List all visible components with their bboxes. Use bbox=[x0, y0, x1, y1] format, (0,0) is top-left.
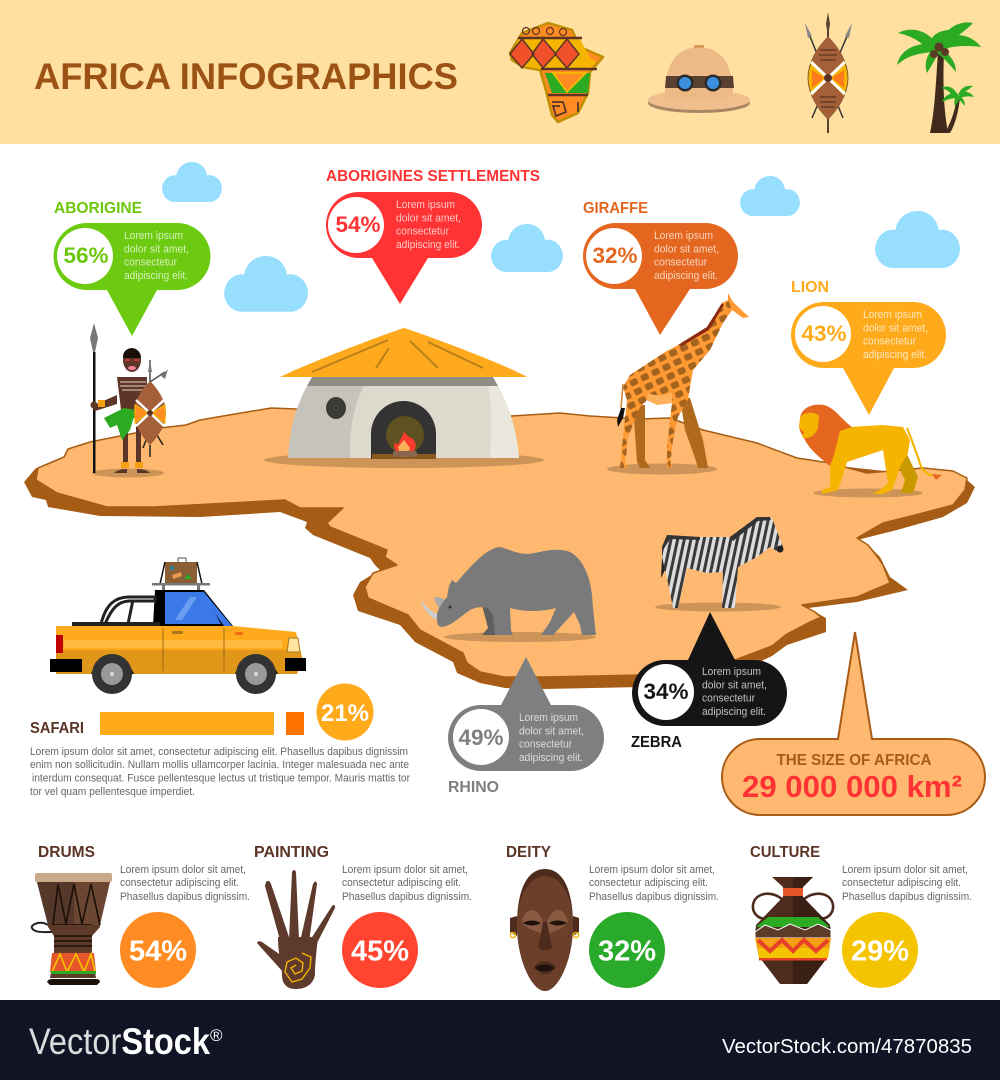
heading: ZEBRA bbox=[631, 734, 682, 751]
balloon text: consectetur bbox=[654, 256, 707, 268]
balloon text: Lorem ipsum bbox=[702, 666, 761, 678]
balloon text: consectetur bbox=[396, 226, 449, 238]
illustration: aborigine warrior bbox=[90, 323, 168, 478]
description: consectetur adipiscing elit. bbox=[120, 877, 239, 889]
cloud bbox=[162, 162, 222, 202]
panel: giraffe callout bbox=[583, 200, 738, 335]
description bbox=[342, 864, 472, 903]
balloon text: dolor sit amet, bbox=[863, 322, 928, 334]
description: enim non sollicitudin. Nullam mollis ullamcorper lacinia. Integer malesuada nec ante bbox=[30, 759, 409, 771]
white circle with percentage: 43% bbox=[801, 321, 847, 346]
description bbox=[589, 864, 719, 903]
illustration: rhino bbox=[421, 547, 596, 642]
white circle with percentage: 32% bbox=[592, 243, 638, 268]
balloon text: consectetur bbox=[519, 738, 572, 750]
balloon bbox=[448, 657, 604, 771]
balloon text bbox=[519, 712, 584, 764]
balloon bbox=[583, 223, 738, 335]
balloon text: consectetur bbox=[702, 692, 755, 704]
balloon text: Lorem ipsum bbox=[654, 230, 713, 242]
percentage circle: 29% bbox=[851, 936, 909, 968]
panel: safari bbox=[30, 684, 410, 798]
balloon bbox=[54, 223, 210, 336]
description: Phasellus dapibus dignissim. bbox=[120, 891, 250, 903]
balloon text bbox=[702, 666, 767, 718]
pointer balloon bbox=[722, 632, 985, 815]
illustration: giraffe bbox=[607, 293, 749, 474]
percentage circle bbox=[589, 912, 665, 988]
balloon bbox=[326, 192, 482, 304]
balloon text bbox=[654, 230, 719, 282]
description: Lorem ipsum dolor sit amet, bbox=[589, 864, 715, 876]
description: consectetur adipiscing elit. bbox=[842, 877, 961, 889]
balloon text: Lorem ipsum bbox=[519, 712, 578, 724]
balloon text: adipiscing elit. bbox=[519, 752, 583, 764]
balloon text bbox=[124, 230, 189, 282]
balloon text: dolor sit amet, bbox=[654, 244, 719, 256]
panel: zebra callout bbox=[631, 612, 787, 751]
header band bbox=[0, 0, 1000, 144]
balloon text: Lorem ipsum bbox=[863, 309, 922, 321]
progress bar bbox=[100, 712, 304, 735]
balloon text: dolor sit amet, bbox=[396, 212, 461, 224]
white circle with percentage bbox=[57, 228, 113, 284]
icon: pith helmet bbox=[648, 45, 750, 113]
description: interdum consequat. Fusce pellentesque lectus ut tristique tempor. Mauris mattis tor bbox=[32, 772, 410, 784]
description bbox=[120, 864, 250, 903]
heading: CULTURE bbox=[750, 844, 820, 861]
percentage circle bbox=[316, 684, 374, 740]
registered mark: ® bbox=[210, 1026, 223, 1045]
panel: settlements callout bbox=[326, 168, 540, 304]
description: Phasellus dapibus dignissim. bbox=[342, 891, 472, 903]
cloud bbox=[491, 224, 563, 272]
balloon text: adipiscing elit. bbox=[654, 270, 718, 282]
white circle with percentage bbox=[586, 228, 642, 284]
percentage circle: 45% bbox=[351, 936, 409, 968]
description: Lorem ipsum dolor sit amet, bbox=[342, 864, 468, 876]
icon: tribal mask bbox=[510, 869, 579, 991]
panel: lion callout bbox=[791, 279, 946, 415]
balloon text: adipiscing elit. bbox=[702, 706, 766, 718]
heading: DEITY bbox=[506, 844, 551, 861]
balloon text: dolor sit amet, bbox=[702, 680, 767, 692]
icon: decorated vase bbox=[753, 877, 833, 984]
icon: palm trees bbox=[897, 22, 981, 133]
balloon text: adipiscing elit. bbox=[396, 239, 460, 251]
white circle with percentage: 56% bbox=[63, 243, 109, 268]
cloud bbox=[740, 176, 800, 216]
balloon text: adipiscing elit. bbox=[124, 270, 188, 282]
footer id: VectorStock.com/47870835 bbox=[722, 1036, 972, 1058]
description: Phasellus dapibus dignissim. bbox=[589, 891, 719, 903]
description: consectetur adipiscing elit. bbox=[342, 877, 461, 889]
description: tor vel quam pellentesque imperdiet. bbox=[30, 786, 195, 798]
heading: LION bbox=[791, 279, 829, 296]
illustration: zebra bbox=[655, 517, 784, 612]
white circle with percentage bbox=[638, 664, 694, 720]
balloon text: dolor sit amet, bbox=[519, 726, 584, 738]
balloon text: Lorem ipsum bbox=[396, 199, 455, 211]
footer logo: VectorStock bbox=[29, 1021, 210, 1062]
description bbox=[30, 746, 410, 798]
heading: ABORIGINE bbox=[54, 200, 142, 217]
footer band bbox=[0, 1000, 1000, 1080]
panel: painting bbox=[254, 844, 472, 989]
balloon text: consectetur bbox=[124, 256, 177, 268]
size value: 29 000 000 km² bbox=[742, 769, 962, 804]
balloon text: dolor sit amet, bbox=[124, 244, 189, 256]
panel: rhino callout bbox=[448, 657, 604, 796]
panel: size of africa callout bbox=[722, 632, 985, 815]
panel: deity bbox=[506, 844, 719, 991]
percentage circle bbox=[120, 912, 196, 988]
percentage circle: 32% bbox=[598, 936, 656, 968]
white circle with percentage: 34% bbox=[643, 679, 689, 704]
description bbox=[842, 864, 972, 903]
white circle with percentage bbox=[453, 709, 509, 765]
illustration: safari car bbox=[50, 558, 306, 694]
heading: SAFARI bbox=[30, 720, 84, 737]
illustration: lion bbox=[799, 405, 942, 498]
balloon text: adipiscing elit. bbox=[863, 349, 927, 361]
white circle with percentage bbox=[328, 197, 384, 253]
description: Phasellus dapibus dignissim. bbox=[842, 891, 972, 903]
heading: RHINO bbox=[448, 779, 499, 796]
heading: PAINTING bbox=[254, 844, 329, 861]
heading: DRUMS bbox=[38, 844, 95, 861]
white circle with percentage bbox=[795, 306, 851, 362]
percentage circle bbox=[342, 912, 418, 988]
panel: culture bbox=[750, 844, 972, 988]
description: Lorem ipsum dolor sit amet, consectetur adipiscing elit. Phasellus dapibus dignissim bbox=[30, 746, 408, 758]
balloon text: Lorem ipsum bbox=[124, 230, 183, 242]
balloon text: consectetur bbox=[863, 336, 916, 348]
balloon text bbox=[863, 309, 928, 361]
percentage circle: 54% bbox=[129, 936, 187, 968]
white circle with percentage: 54% bbox=[335, 212, 381, 237]
icon: painted hand bbox=[257, 870, 335, 989]
cloud bbox=[875, 211, 960, 268]
map of africa bbox=[24, 408, 975, 689]
icon: patterned africa map bbox=[510, 23, 603, 122]
description: Lorem ipsum dolor sit amet, bbox=[842, 864, 968, 876]
icon: djembe drum bbox=[32, 873, 112, 985]
title: AFRICA INFOGRAPHICS bbox=[34, 56, 458, 97]
heading: ABORIGINES SETTLEMENTS bbox=[326, 168, 540, 185]
description: consectetur adipiscing elit. bbox=[589, 877, 708, 889]
panel: aborigine callout bbox=[54, 200, 210, 336]
balloon bbox=[791, 302, 946, 415]
balloon bbox=[632, 612, 787, 726]
panel: drums bbox=[32, 844, 250, 988]
heading: GIRAFFE bbox=[583, 200, 648, 217]
illustration: hut with fire bbox=[264, 328, 544, 468]
percentage circle bbox=[842, 912, 918, 988]
size label: THE SIZE OF AFRICA bbox=[776, 752, 932, 769]
description: Lorem ipsum dolor sit amet, bbox=[120, 864, 246, 876]
percentage circle: 21% bbox=[321, 700, 369, 727]
icon: shield and spears bbox=[805, 12, 852, 133]
cloud bbox=[224, 256, 308, 312]
white circle with percentage: 49% bbox=[458, 725, 504, 750]
balloon text bbox=[396, 199, 461, 251]
